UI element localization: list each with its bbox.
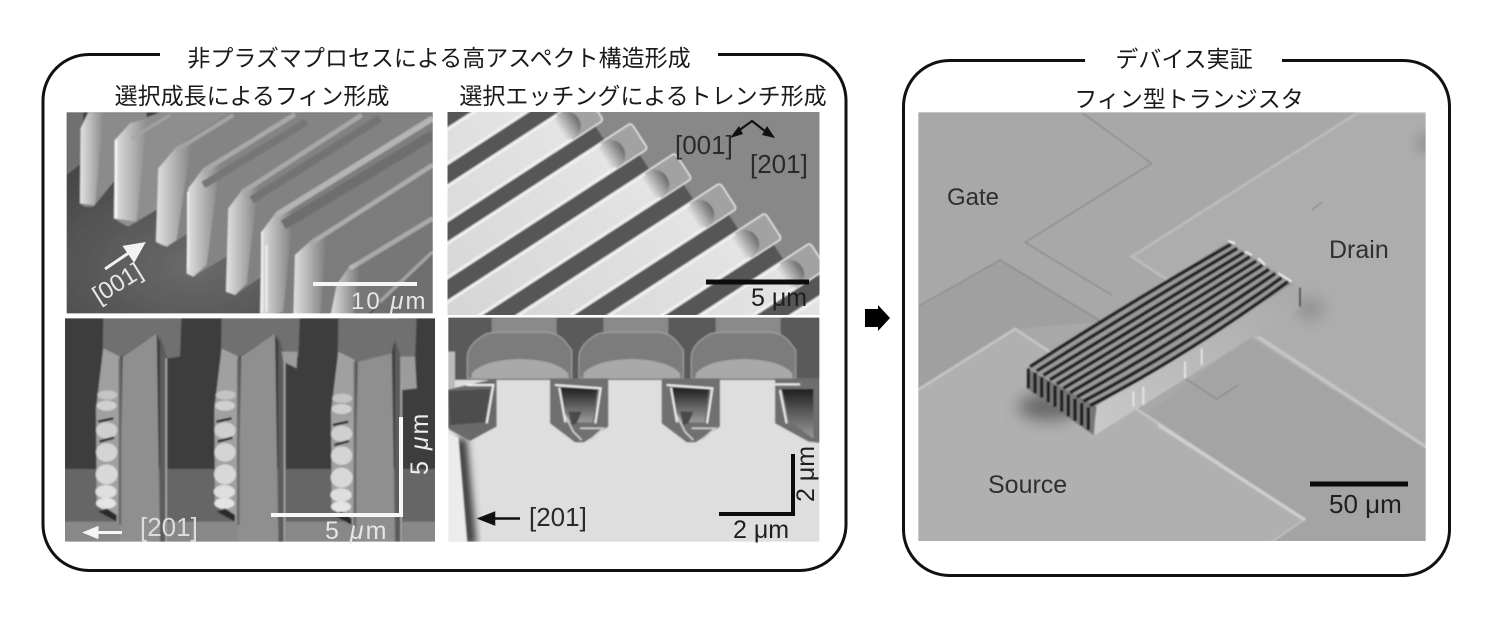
panel heading: デバイス実証 <box>1115 46 1253 72</box>
panel frame <box>43 54 846 570</box>
subheading: fin transistor: フィン型トランジスタ <box>1074 86 1304 112</box>
label group: fin cross-section annotations <box>86 412 434 545</box>
scale bar: 10 um <box>313 282 417 286</box>
SEM image: fin cross-section <box>62 315 438 548</box>
label: Drain: Drain <box>1329 236 1389 264</box>
label: Gate: Gate <box>947 184 999 211</box>
label group: growth fin view annotations <box>88 244 428 315</box>
label group: etched trench view annotations <box>675 121 809 312</box>
scale label: 5 um vertical: 5 μm <box>406 412 434 475</box>
scale label: 10 um: 10 μm <box>351 288 428 315</box>
label: [201]: [201] <box>750 149 808 179</box>
title background gap <box>1085 50 1282 72</box>
subheading: trench formation: 選択エッチングによるトレンチ形成 <box>459 83 827 109</box>
SEM image: fin transistor device <box>915 109 1433 546</box>
scale bar: 50 um <box>1310 482 1408 486</box>
arrow: [001] direction <box>105 244 143 269</box>
scale bar: 5 um <box>706 280 809 284</box>
SEM image: selective etching trenches, tilted view <box>448 112 820 315</box>
label: [201]: [201] <box>140 512 198 542</box>
arrow: process to device demonstration <box>865 305 890 331</box>
SEM image: trench cross-section <box>445 315 823 545</box>
scale label: 50 um: 50 μm <box>1329 489 1402 519</box>
scale label: 2 um horizontal: 2 μm <box>733 516 789 544</box>
scale label: 5 um horizontal: 5 μm <box>325 517 388 545</box>
label: [001]: [001] <box>88 258 147 309</box>
scale label: 2 um vertical: 2 μm <box>792 446 820 502</box>
panel: non-plasma high aspect structure formation <box>43 36 882 570</box>
panel frame <box>904 60 1450 576</box>
panel: device demonstration <box>904 46 1450 576</box>
SEM image: selective growth fins, tilted view <box>63 108 437 318</box>
title background gap <box>160 44 718 66</box>
scale label: 5 um: 5 μm <box>751 284 807 312</box>
label group: trench cross-section annotations <box>480 446 820 544</box>
scale bar: L-shaped 2 um <box>719 454 793 514</box>
panel heading: 非プラズマプロセスによる高アスペクト構造形成 <box>187 45 691 71</box>
label: [001]: [001] <box>675 130 733 160</box>
arrow: double crystal direction <box>730 121 775 138</box>
scale bar: L-shaped 5 um <box>271 417 401 515</box>
arrow: [201] direction <box>86 528 122 537</box>
label: Source: Source <box>988 471 1067 499</box>
label: [201]: [201] <box>529 502 587 532</box>
subheading: fin formation: 選択成長によるフィン形成 <box>115 83 389 109</box>
arrow: [201] direction <box>480 513 520 524</box>
